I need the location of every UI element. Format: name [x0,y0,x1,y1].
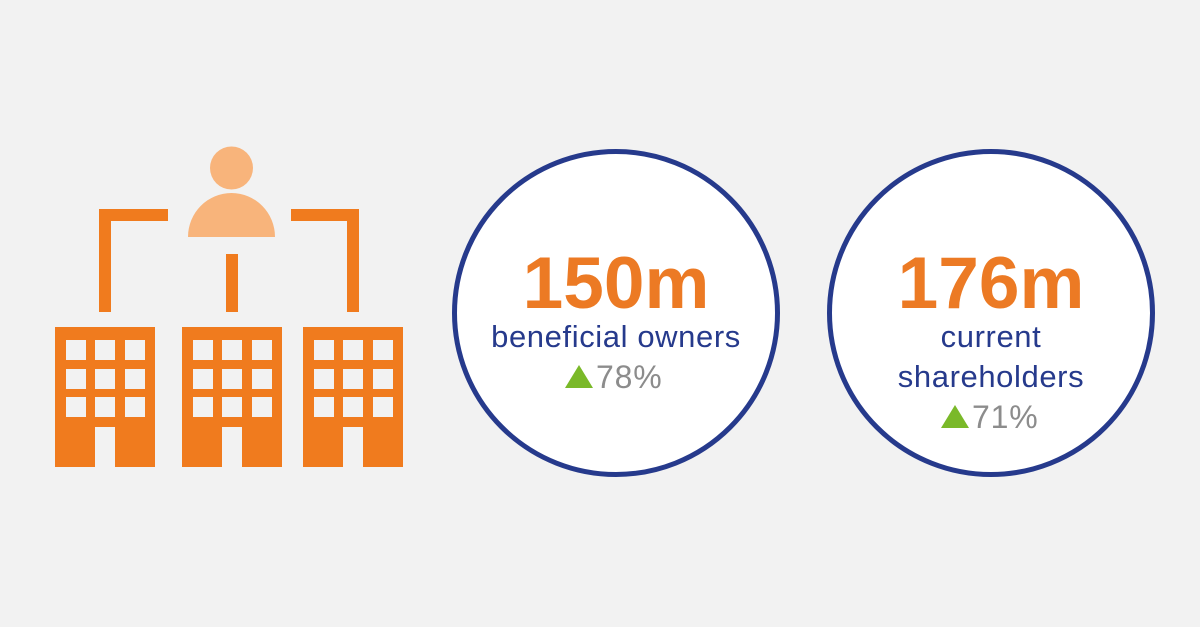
label: current shareholders: current [941,319,1041,354]
icon: person [188,146,275,237]
panel: beneficial owners [454,152,778,474]
change: 71% [941,399,1038,435]
stat: 150m: 150m [523,243,709,324]
change: 78%: 78% [596,359,662,395]
icon: organisation structure [55,146,403,467]
stat: 176m: 176m [898,243,1084,324]
label: current shareholders: shareholders [898,359,1084,394]
label: beneficial owners: beneficial owners [491,319,741,354]
panel: current shareholders [830,152,1152,474]
change: 78% [565,359,662,395]
change: 71%: 71% [972,399,1038,435]
connector lines [99,209,359,312]
icon: buildings [55,327,403,467]
